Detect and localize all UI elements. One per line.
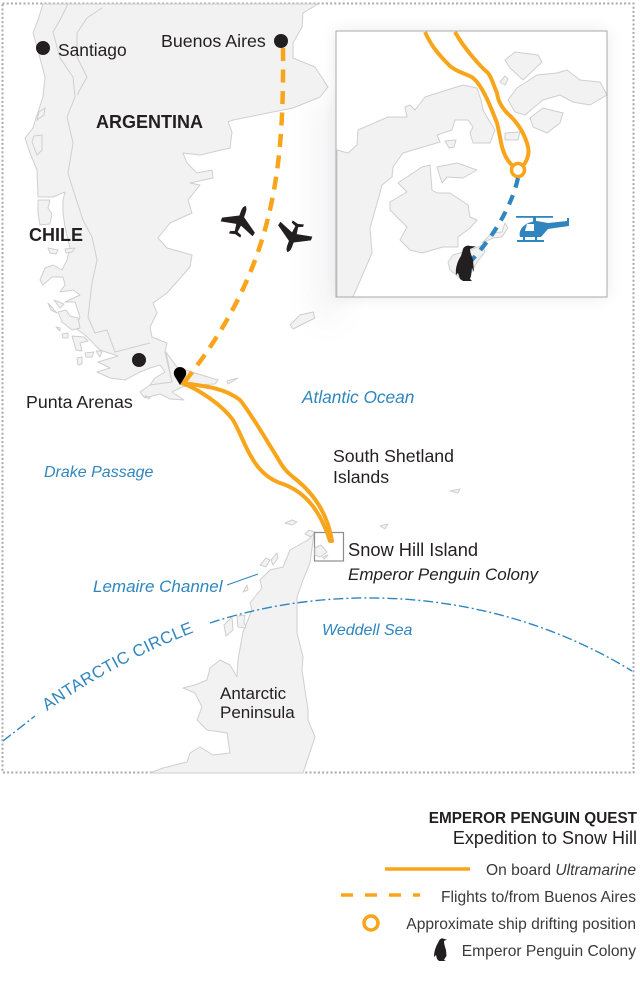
place labels: CHILE bbox=[29, 225, 83, 245]
place labels: Snow Hill Island bbox=[348, 539, 478, 560]
map panel bbox=[2, 2, 634, 774]
snow hill box bbox=[314, 532, 344, 561]
antarctic circle bbox=[2, 597, 632, 742]
pin: Ushuaia bbox=[174, 367, 186, 385]
inset map bbox=[336, 31, 607, 297]
legend: drifting: Approximate ship drifting position bbox=[406, 916, 636, 933]
icon: plane right bbox=[271, 216, 315, 258]
place labels: Punta Arenas bbox=[26, 392, 133, 412]
place labels bbox=[26, 31, 539, 722]
antarctic circle: ANTARCTIC CIRCLE bbox=[44, 622, 194, 711]
sea labels bbox=[44, 387, 414, 639]
islands near Antarctic Circle bbox=[224, 615, 246, 636]
place labels: Peninsula bbox=[220, 703, 295, 722]
drifting position bbox=[512, 164, 524, 176]
sea labels: Lemaire Channel bbox=[93, 577, 224, 596]
map border bbox=[2, 4, 634, 772]
legend: ship: On board Ultramarine bbox=[486, 862, 636, 879]
land: small islands bbox=[243, 489, 460, 592]
flight route: dashed line bbox=[182, 48, 283, 385]
helicopter route bbox=[470, 178, 518, 262]
icon: plane left bbox=[218, 200, 262, 242]
land: Antarctic Peninsula bbox=[150, 534, 315, 773]
legend subtitle: Expedition to Snow Hill bbox=[453, 828, 637, 848]
inset land bbox=[337, 52, 607, 297]
legend: colony bbox=[434, 938, 636, 961]
legend bbox=[340, 810, 638, 961]
place labels: Buenos Aires bbox=[161, 31, 266, 51]
place labels: Emperor Penguin Colony bbox=[348, 565, 539, 584]
inset ship route bbox=[425, 32, 529, 170]
legend: flights: Flights to/from Buenos Aires bbox=[441, 889, 636, 906]
place labels: Santiago bbox=[58, 40, 127, 60]
dots: cities bbox=[36, 34, 288, 367]
icon: penguin bbox=[456, 246, 476, 281]
legend: colony: Emperor Penguin Colony bbox=[462, 943, 636, 960]
place labels: South Shetland bbox=[333, 446, 454, 466]
sea labels: Atlantic Ocean bbox=[301, 387, 414, 407]
legend title: EMPEROR PENGUIN QUEST bbox=[429, 810, 638, 827]
Lemaire leader bbox=[227, 574, 258, 585]
place labels: ARGENTINA bbox=[96, 112, 203, 132]
land: South America bbox=[25, 4, 328, 400]
icon: helicopter bbox=[516, 216, 569, 242]
ship route: solid lines bbox=[182, 383, 332, 541]
place labels: Antarctic bbox=[220, 684, 287, 703]
sea labels: Drake Passage bbox=[44, 464, 153, 481]
place labels: Islands bbox=[333, 467, 389, 487]
sea labels: Weddell Sea bbox=[322, 622, 413, 639]
